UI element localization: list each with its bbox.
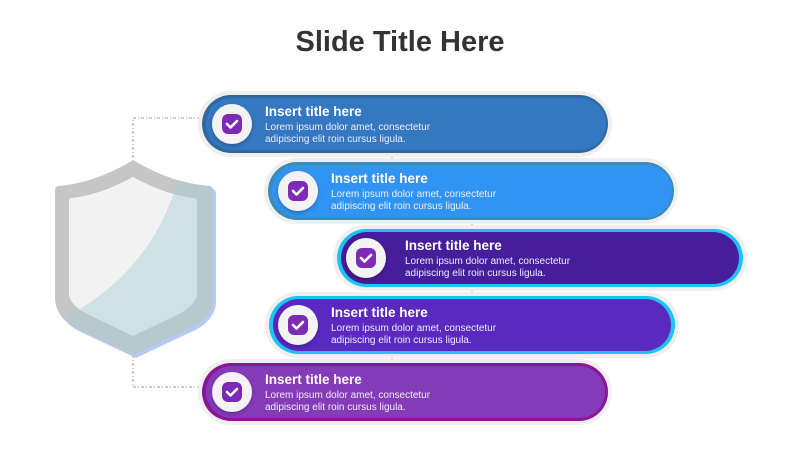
- item 2: Lorem ipsum dolor amet, consectetur: [331, 189, 497, 200]
- item 3: Insert title here: [405, 238, 502, 253]
- item 1: adipiscing elit roin cursus ligula.: [265, 134, 406, 145]
- icon: shield: [55, 160, 216, 358]
- item 4: [265, 292, 679, 358]
- icon: check 1: [212, 104, 252, 144]
- item 3: Lorem ipsum dolor amet, consectetur: [405, 256, 571, 267]
- title: Slide Title Here: [296, 26, 504, 58]
- item 1: Lorem ipsum dolor amet, consectetur: [265, 122, 431, 133]
- icon: check 5: [212, 372, 252, 412]
- item 5: Lorem ipsum dolor amet, consectetur: [265, 390, 431, 401]
- item 3: adipiscing elit roin cursus ligula.: [405, 268, 546, 279]
- item 2: [264, 158, 678, 224]
- item 2: adipiscing elit roin cursus ligula.: [331, 201, 472, 212]
- connector lines: [133, 118, 472, 387]
- item 5: [198, 359, 612, 425]
- item 4: adipiscing elit roin cursus ligula.: [331, 335, 472, 346]
- item 5: Insert title here: [265, 372, 362, 387]
- item 2: Insert title here: [331, 171, 428, 186]
- item 1: Insert title here: [265, 104, 362, 119]
- item 3: [333, 225, 747, 291]
- icon: check 3: [346, 238, 386, 278]
- item 4: Lorem ipsum dolor amet, consectetur: [331, 323, 497, 334]
- icon: check 2: [278, 171, 318, 211]
- item 1: [198, 91, 612, 157]
- item 4: Insert title here: [331, 305, 428, 320]
- item 5: adipiscing elit roin cursus ligula.: [265, 402, 406, 413]
- icon: check 4: [278, 305, 318, 345]
